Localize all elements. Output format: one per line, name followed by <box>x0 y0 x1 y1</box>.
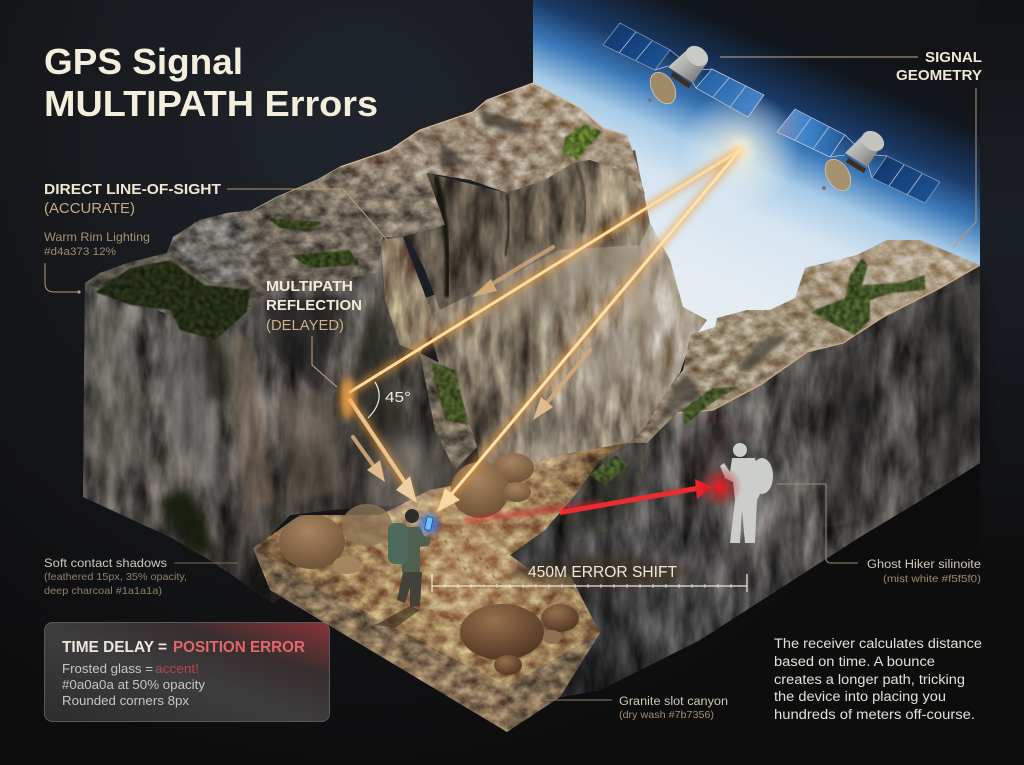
callout: direct line of sight: DIRECT LINE-OF-SIGHT <box>44 181 221 198</box>
satellite 2 <box>777 109 940 203</box>
callout: soft contact shadows: (feathered 15px, 35% opacity, <box>44 571 187 583</box>
mist streaks on back wall <box>490 240 665 400</box>
callout: ghost hiker silhouette: (mist white #f5f5f0) <box>883 573 981 585</box>
upper tower wall <box>385 150 650 310</box>
left face highlights and shadows <box>90 295 410 555</box>
text block: explanation: creates a longer path, tricking <box>774 672 965 687</box>
panel: time delay equals position error: accent! <box>155 661 199 676</box>
floor front left face <box>253 548 507 732</box>
angle marker: 45 degrees: 45° <box>385 389 411 406</box>
mossy outcrop <box>420 353 477 470</box>
callout: soft contact shadows <box>44 556 238 597</box>
callout: granite slot canyon: (dry wash #7b7356) <box>619 709 714 721</box>
right block moss <box>590 258 925 485</box>
scale bar: error shift <box>432 556 747 592</box>
panel: time delay equals position error: POSITION ERROR <box>173 639 305 656</box>
panel: time delay equals position error: Rounded corners 8px <box>62 693 189 708</box>
text block: explanation: hundreds of meters off-course. <box>774 707 975 722</box>
scale bar: error shift: 450M ERROR SHIFT <box>528 564 677 581</box>
glow of beams <box>350 150 740 508</box>
dark backdrop for scale label <box>510 556 690 588</box>
right rock block face <box>510 265 980 697</box>
hiker with phone <box>375 509 443 628</box>
tower top surface <box>340 83 645 195</box>
callout: signal geometry <box>720 49 982 247</box>
callout: soft contact shadows: Soft contact shadows <box>44 556 167 570</box>
callout: signal geometry: GEOMETRY <box>896 67 982 84</box>
panel: time delay equals position error <box>44 622 330 722</box>
boulders <box>279 453 579 675</box>
floor front right face <box>507 633 600 732</box>
callout: direct line of sight <box>44 181 388 241</box>
canyon floor <box>253 443 628 687</box>
title: GPS Signal <box>44 41 243 82</box>
tower top shadows <box>440 110 525 168</box>
text block: explanation: The receiver calculates distance <box>774 636 982 651</box>
right top shadow <box>737 333 793 372</box>
panel: time delay equals position error: Frosted glass = <box>62 661 153 676</box>
angle marker: 45 degrees <box>368 382 411 418</box>
left cliff face <box>83 237 485 603</box>
light shafts and mist <box>367 290 670 525</box>
right face shading <box>560 280 980 540</box>
callout: multipath reflection: REFLECTION <box>266 297 362 314</box>
callout: multipath reflection: MULTIPATH <box>266 278 353 295</box>
callout: multipath reflection <box>266 278 362 387</box>
panel: time delay equals position error: #0a0a0a at 50% opacity <box>62 677 206 692</box>
signal beams <box>340 150 740 512</box>
title <box>44 41 378 124</box>
satellite 1 <box>603 23 764 117</box>
callout: ghost hiker silhouette: Ghost Hiker silinoite <box>867 559 981 571</box>
text block: explanation: based on time. A bounce <box>774 654 935 669</box>
beam core lines <box>350 150 740 508</box>
arrow heads <box>367 279 553 512</box>
mist blending tower wall into canyon <box>470 240 650 330</box>
canyon scene <box>83 83 980 732</box>
left cliff top surface <box>85 167 445 315</box>
sand footprints <box>345 530 500 630</box>
bounce flare <box>340 376 354 420</box>
callout: warm rim lighting: Warm Rim Lighting <box>44 230 150 244</box>
text block: explanation <box>774 636 982 722</box>
callout: granite slot canyon <box>543 696 728 721</box>
callout: signal geometry: SIGNAL <box>925 49 982 66</box>
red error beam <box>463 465 742 524</box>
sky and atmosphere <box>533 0 980 345</box>
callout: warm rim lighting <box>44 230 150 294</box>
grey boulder on left cliff top <box>170 218 260 282</box>
secondary arrows <box>353 247 590 472</box>
callout: granite slot canyon: Granite slot canyon <box>619 696 728 708</box>
left block moss <box>95 124 603 425</box>
callout: warm rim lighting: #d4a373 12% <box>44 246 116 258</box>
front pillar lit face <box>381 237 437 353</box>
title: MULTIPATH Errors <box>44 83 378 124</box>
misty back canyon wall <box>420 223 707 480</box>
tower cracks <box>436 165 585 295</box>
ghost hiker silhouette <box>700 430 800 560</box>
callout: multipath reflection: (DELAYED) <box>266 317 344 334</box>
callout: soft contact shadows: deep charcoal #1a1a1a) <box>44 585 162 597</box>
callout: ghost hiker silhouette <box>777 484 981 585</box>
right edge band <box>980 0 1024 560</box>
right rock block top <box>628 240 980 443</box>
callout: direct line of sight: (ACCURATE) <box>44 200 135 217</box>
panel: time delay equals position error: TIME DELAY = <box>62 639 167 656</box>
text block: explanation: the device into placing you <box>774 689 946 704</box>
